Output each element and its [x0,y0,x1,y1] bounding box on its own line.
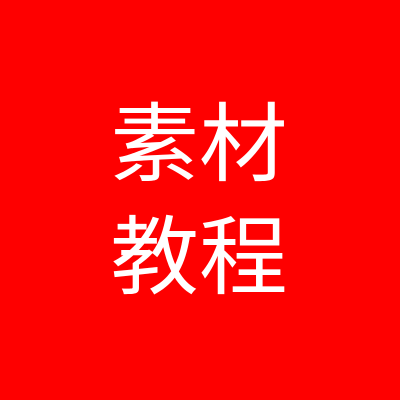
title: line 1: 素材 [110,97,288,193]
title: line 2: 教程 [110,210,288,306]
